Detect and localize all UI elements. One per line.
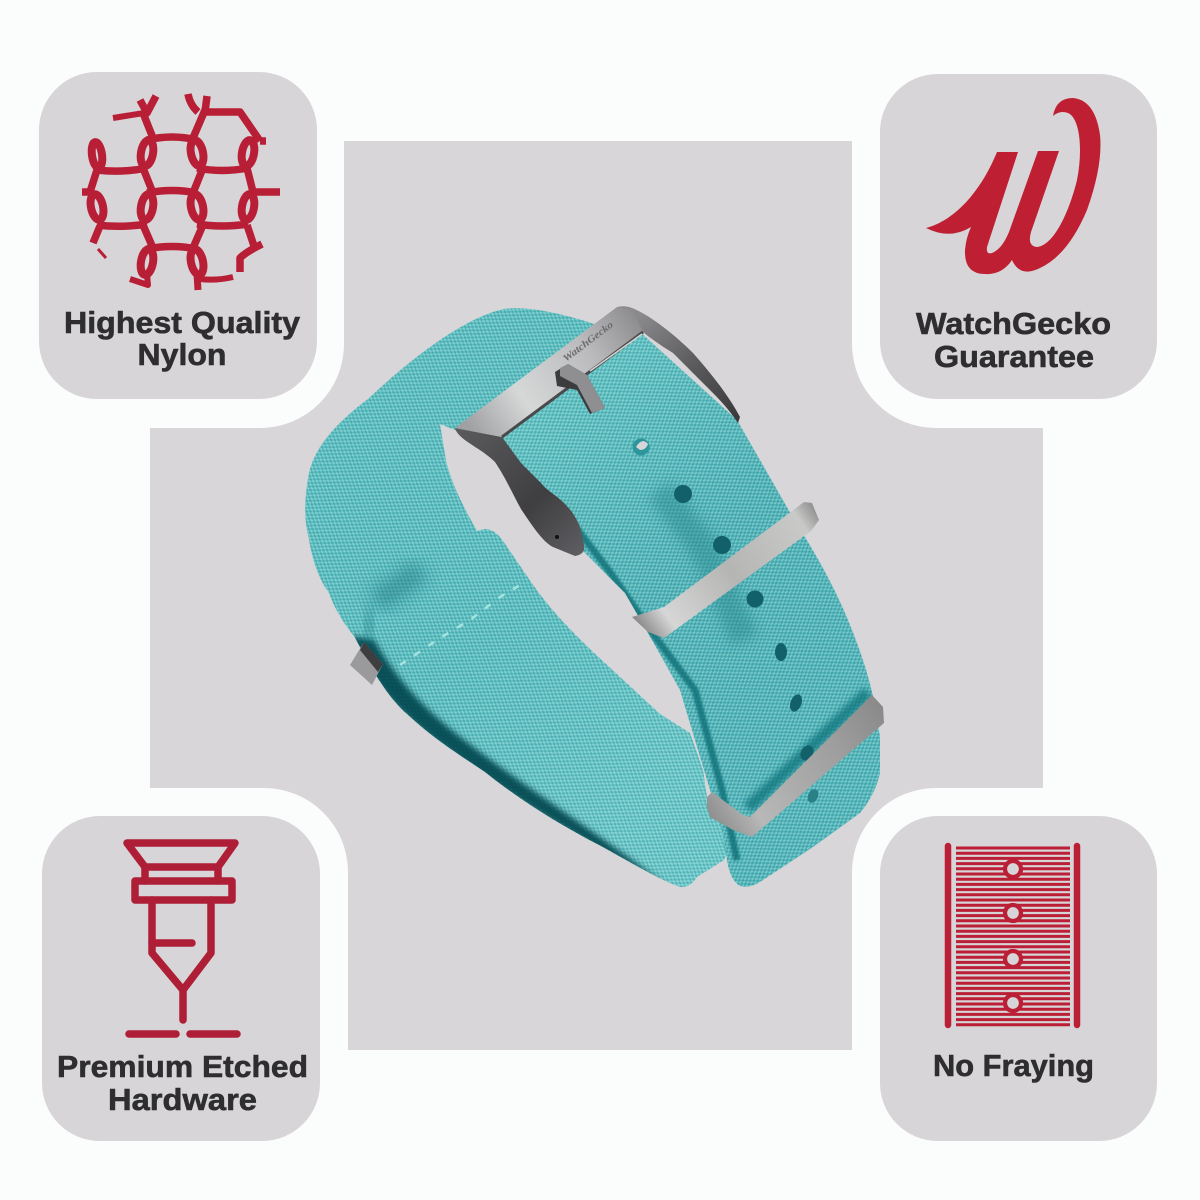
label: Premium Etched Hardware: Hardware bbox=[108, 1082, 257, 1117]
label: Highest Quality Nylon: Highest Quality bbox=[64, 305, 301, 340]
panel: No Fraying bbox=[880, 816, 1157, 1141]
strap back loop bbox=[305, 308, 726, 888]
side steel keeper bbox=[350, 642, 383, 685]
panel: Highest Quality Nylon bbox=[39, 72, 317, 399]
buckle bbox=[455, 306, 740, 556]
strap front section bbox=[490, 320, 890, 900]
white halo: bottom-left bbox=[14, 788, 348, 1170]
label: WatchGecko Guarantee: WatchGecko bbox=[916, 306, 1111, 341]
lower steel keeper bbox=[707, 695, 884, 837]
icon: non-fraying strap weave bbox=[948, 846, 1077, 1027]
label: Highest Quality Nylon bbox=[64, 305, 301, 372]
watch strap illustration bbox=[290, 290, 890, 910]
upper steel keeper bbox=[632, 502, 819, 638]
white halo: bottom-right bbox=[852, 788, 1182, 1170]
icon: WatchGecko W logo bbox=[926, 98, 1100, 274]
label: Highest Quality Nylon: Nylon bbox=[138, 337, 226, 372]
label: No Fraying: No Fraying bbox=[933, 1048, 1094, 1083]
label: Premium Etched Hardware bbox=[57, 1049, 308, 1117]
central grey cross panel bbox=[150, 141, 1043, 1050]
card background bbox=[39, 72, 317, 399]
buckle tongue keeper bbox=[555, 364, 605, 414]
card background bbox=[880, 74, 1157, 399]
white halo: top-left bbox=[14, 46, 344, 428]
label: WatchGecko Guarantee: Guarantee bbox=[934, 339, 1094, 374]
label: Premium Etched Hardware: Premium Etched bbox=[57, 1049, 308, 1084]
label: WatchGecko Guarantee bbox=[916, 306, 1111, 374]
card background bbox=[42, 816, 320, 1141]
card background bbox=[880, 816, 1157, 1141]
strap holes bbox=[632, 438, 820, 804]
panel: WatchGecko Guarantee bbox=[880, 74, 1157, 399]
white halo: top-right bbox=[852, 46, 1182, 428]
panel: Premium Etched Hardware bbox=[42, 816, 320, 1141]
buckle engraving: WatchGecko bbox=[561, 320, 616, 364]
icon: laser etching nozzle bbox=[127, 843, 237, 1034]
icon: woven nylon mesh bbox=[82, 94, 280, 290]
